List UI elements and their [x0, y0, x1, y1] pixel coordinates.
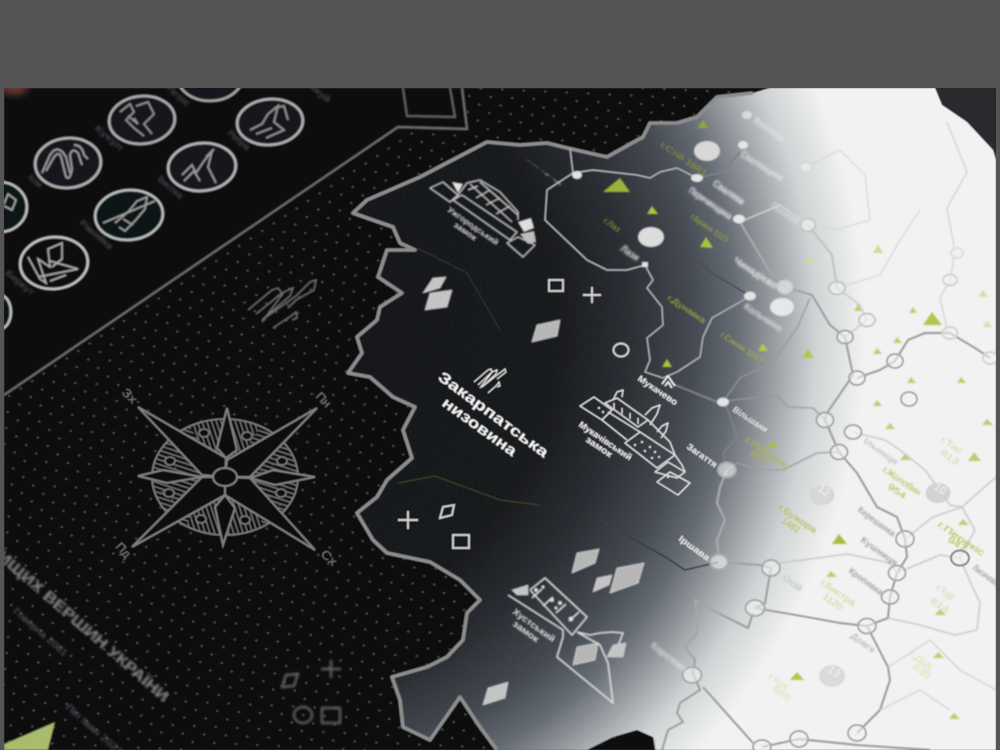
- map of Zakarpattia: 814: [929, 595, 951, 615]
- compass points: [132, 407, 317, 550]
- map of Zakarpattia: г.Тис: [939, 434, 965, 456]
- green peak names: [602, 140, 766, 366]
- map of Zakarpattia: 1017: [748, 447, 772, 468]
- blurred white town labels: Кольчино: [741, 301, 784, 334]
- large white circles: [638, 141, 794, 316]
- town labels in white: Загаття: [685, 441, 719, 470]
- castle drawing: [580, 390, 690, 495]
- peak Pip Ivan: Піп Іван 2022: [64, 702, 125, 750]
- compass rose: [113, 385, 340, 569]
- castle name: замок: [452, 220, 479, 243]
- map of Zakarpattia: г.Бужора: [777, 502, 819, 535]
- map of Zakarpattia: 1120: [821, 591, 845, 612]
- blurred white town labels: Чинадієво: [731, 255, 779, 292]
- map of Zakarpattia: г.Кук: [767, 671, 791, 692]
- badge labels: Ребра: [226, 128, 252, 152]
- notch inner square: [403, 88, 455, 117]
- Mukachevo castle: [577, 390, 690, 495]
- map of Zakarpattia: 830: [911, 661, 933, 681]
- road junction nodes: [682, 162, 997, 750]
- icon: lowland figures: [474, 369, 506, 393]
- faded symbols outside map: [282, 660, 341, 723]
- map of Zakarpattia: 954: [886, 481, 908, 501]
- region name: [435, 369, 552, 462]
- castle name: Ужгородський: [446, 205, 500, 247]
- badge labels: Рівняйка: [78, 218, 115, 251]
- grey number badges: 10: [931, 481, 948, 498]
- map of Zakarpattia: [340, 88, 1000, 750]
- badge labels: Хом: [26, 172, 44, 190]
- grey number badges: 12: [815, 483, 832, 500]
- compass labels: Сх: [318, 547, 340, 569]
- thick road network: [662, 222, 990, 750]
- map of Zakarpattia: г.Дід: [907, 648, 935, 672]
- castle drawing: [430, 180, 535, 257]
- dotted background: [4, 88, 804, 750]
- map grain: [372, 146, 610, 748]
- ring circles: [164, 429, 287, 524]
- badge: partial bottom: [0, 295, 11, 329]
- Khust castle: [508, 578, 623, 703]
- hatched compass ring: [150, 417, 300, 537]
- compass labels: Пд: [113, 540, 134, 561]
- grey town labels: Керешанка: [856, 505, 898, 539]
- castle drawing: [508, 578, 623, 703]
- reddish corner glimpse: [4, 88, 32, 100]
- badge labels: [4, 79, 333, 297]
- badge: mountain 4: [166, 140, 238, 194]
- map of Zakarpattia: 1482: [780, 515, 802, 535]
- badge: mountain 3: [235, 96, 305, 148]
- blurred white town labels: Королево: [648, 641, 688, 675]
- town labels in white: Іршава: [677, 534, 713, 563]
- blurred white town labels: Поляна: [768, 200, 801, 228]
- badge: mountain 2: [33, 135, 103, 191]
- blurred white town labels: Свалява: [710, 178, 747, 208]
- castle windows: [534, 585, 573, 621]
- compass labels: Зх: [119, 385, 140, 406]
- map of Zakarpattia: 813: [939, 447, 961, 467]
- castle name: Мукачівський: [577, 419, 634, 462]
- white settlement markers: [572, 111, 756, 406]
- map of Zakarpattia: 868: [771, 683, 793, 703]
- icon: Mukachevo house marker: [662, 376, 675, 388]
- castle name: замок: [584, 434, 615, 460]
- map of Zakarpattia: 947: [946, 534, 968, 554]
- blurred white town labels: Воловець: [751, 115, 787, 145]
- thin region borders: [668, 122, 996, 710]
- green peak triangles: [603, 120, 993, 719]
- grey town labels: Кропивка: [847, 566, 886, 598]
- castle name: замок: [511, 619, 541, 645]
- badge: mountain 6: [18, 234, 90, 292]
- map of Zakarpattia: г.Бистра: [819, 577, 858, 608]
- blurred white town labels: Перечинщина: [686, 185, 734, 223]
- badge labels: Висока: [156, 174, 185, 201]
- green peak names: г.Стій 1681: [659, 140, 709, 178]
- green peak names: г.Брана 1015: [689, 212, 731, 245]
- peak Hoverla: Говерла 2061: [12, 606, 70, 658]
- dark inner borders: [545, 148, 750, 378]
- blurred white town labels: Лази: [618, 243, 641, 264]
- faint river lines: [398, 248, 719, 570]
- region name line 2: низовина: [439, 394, 520, 460]
- castle windows: [598, 407, 669, 478]
- compass labels: Пн: [313, 389, 334, 410]
- badge labels: Пікуй: [305, 79, 333, 105]
- badge: mountain 1: [107, 93, 177, 147]
- town labels in white: [525, 153, 770, 563]
- grey town labels: [781, 436, 1000, 655]
- badge labels: Беркут: [4, 268, 36, 297]
- town labels in white: Мукачево: [636, 373, 680, 408]
- grey number badges: [810, 481, 950, 687]
- badge: mountain 5: [93, 187, 165, 243]
- grey town labels: Довге: [849, 631, 877, 655]
- blurred white town labels: [618, 115, 801, 675]
- bottom dark blob: [592, 736, 656, 750]
- map fill gradient: [348, 88, 996, 750]
- town labels in white: Ужгород: [525, 153, 566, 186]
- region name line 1: Закарпатська: [435, 369, 552, 462]
- map of Zakarpattia: г.Тур: [934, 582, 956, 602]
- castle highlights: [452, 182, 463, 193]
- grey town labels: Осій: [781, 573, 805, 594]
- Uzhhorod castle: [430, 180, 536, 257]
- compass labels: [113, 385, 340, 569]
- panel: mountain badge legend: [0, 55, 467, 395]
- top-right dark poster corner: [936, 88, 996, 155]
- map of Zakarpattia: г.Явірник: [744, 434, 789, 470]
- icon: figures in dotted area: [248, 280, 316, 328]
- green peak corner: [4, 722, 55, 750]
- scratch leaf symbols: [423, 277, 644, 705]
- map outline: [348, 93, 753, 750]
- map of Zakarpattia: г.Перекіс: [936, 519, 987, 558]
- grey town labels: Ільниця: [862, 436, 900, 467]
- green peak names: г.Дунавка: [666, 293, 708, 326]
- badge labels: Петрос: [166, 84, 192, 109]
- badge: partial left: [0, 182, 27, 232]
- town labels in white: Вільшани: [731, 404, 770, 434]
- green peak names: г.Синяк 1017: [719, 330, 766, 366]
- badge labels: Кукул: [93, 123, 125, 152]
- badge: top partial: [178, 88, 242, 104]
- blurred white town labels: Свалявщина: [738, 149, 785, 184]
- frame line with notch: [4, 88, 467, 395]
- grey number badges: 13: [825, 664, 842, 681]
- castle name: Хустський: [511, 607, 557, 644]
- scratch outline symbols: [398, 280, 628, 548]
- green peak names: г.Лаз: [602, 216, 622, 234]
- map of Zakarpattia: г.Жолобин: [881, 464, 923, 497]
- panel: highest peaks title: [4, 550, 171, 750]
- grey town labels: Кушниця: [859, 535, 899, 568]
